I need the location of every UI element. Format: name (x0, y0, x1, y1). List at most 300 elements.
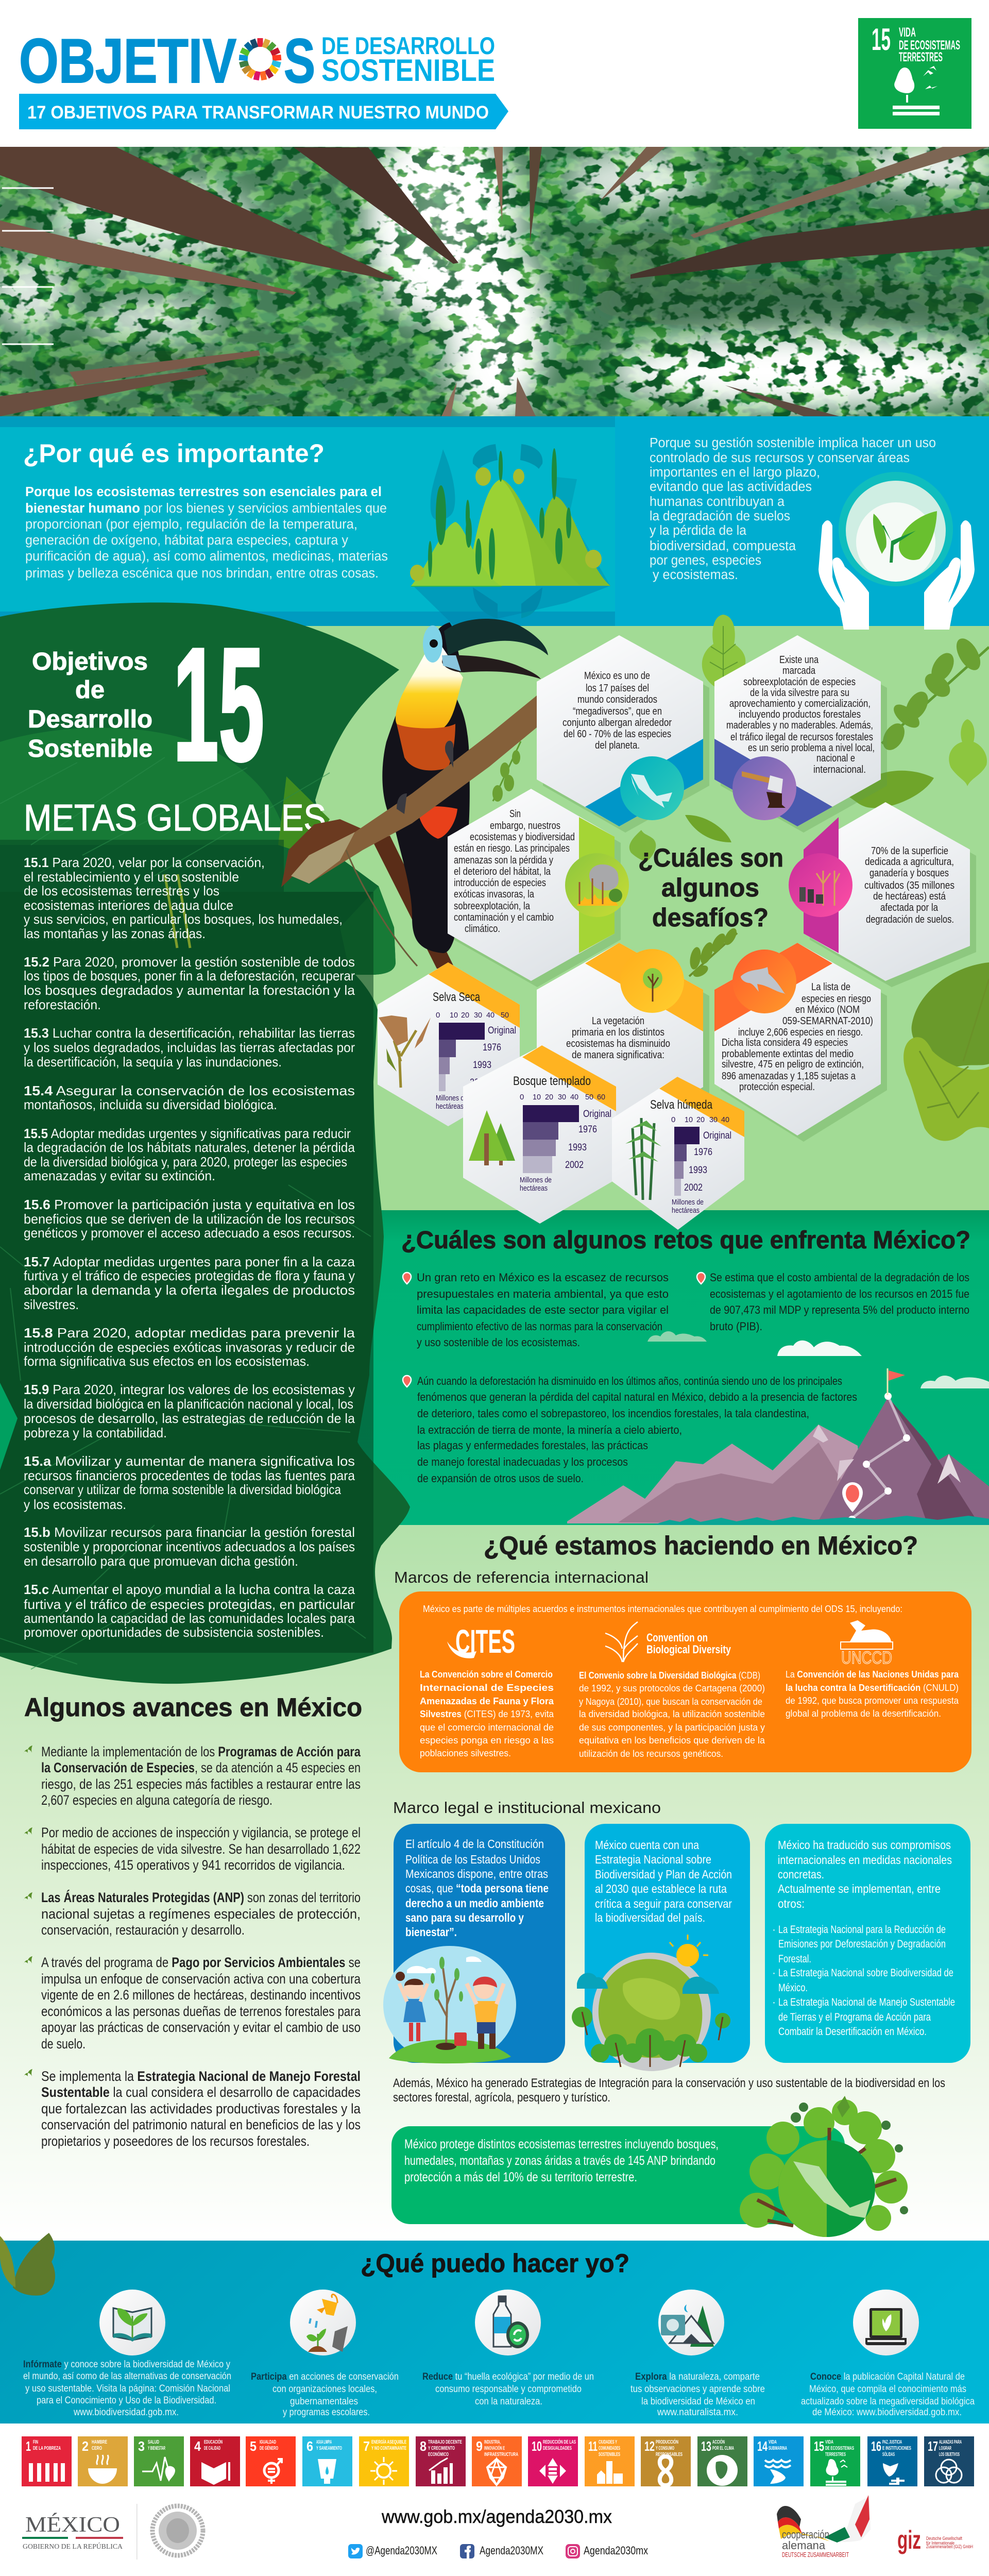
list: avances en México: conservación del patrimonio natural en beneficios de las y los (41, 2117, 361, 2132)
text: metas globales list: aumentando la capacidad de las comunidades locales para (24, 1611, 355, 1626)
action: reduce (422, 2290, 594, 2407)
hexagon: superficie degradada: ganadería y bosques (869, 868, 949, 879)
hexagon chart: selva húmeda: Selva húmeda (650, 1098, 713, 1112)
text: metas globales list: sostenible y proporcionar incentivos adecuados a los países (24, 1539, 355, 1554)
icon: twitter (348, 2544, 363, 2558)
hexagon: vegetación primaria: La vegetación (592, 1015, 644, 1027)
text: CNULD: La Convención de las Naciones Unidas para (786, 1669, 959, 1680)
hexagon chart: bosque templado: 0 (520, 1093, 524, 1101)
text: metas globales list: forma significativa sus efectos en los ecosistemas. (24, 1353, 310, 1369)
text: reto presupuestal: presupuestales en materia ambiental, ya que esto (417, 1287, 669, 1300)
hexagon: sobreexplotación: Existe una (779, 654, 819, 666)
section band: por qué es importante (0, 416, 989, 626)
hexagon chart: selva húmeda: 40 (721, 1115, 729, 1124)
icon: dry trees and barrels (789, 853, 852, 917)
banner: 17 objetivos: 17 OBJETIVOS PARA TRANSFORMAR NUESTRO MUNDO (27, 103, 489, 123)
panel: artículo 4: derecho a un medio ambiente (405, 1896, 544, 1910)
hexagon chart: selva seca (378, 962, 520, 1126)
icon: national seal (152, 2506, 203, 2555)
text: gestión sostenible: humanas contribuyan a (650, 495, 785, 509)
hexagon: especies en riesgo: Dicha lista considera 49 especies (722, 1037, 848, 1048)
hexagon: superficie degradada: dedicada a agricultura, (865, 856, 954, 868)
text: por qué es importante: primas y belleza escénica que nos brindan, entre otras cosas. (25, 566, 379, 581)
text: CITES: Silvestres (CITES) de 1973, evita (420, 1709, 554, 1719)
panel: compromisos internacionales: de Tierras y el Programa de Acción para (778, 2011, 931, 2023)
tile 9: INFRAESTRUCTURA (484, 2452, 518, 2458)
logo: cooperación alemana: DEUTSCHE ZUSAMMENARBEIT (782, 2551, 849, 2558)
text: metas globales list: 15.1 Para 2020, velar por la conservación, (24, 855, 265, 870)
action: explora: www.naturalista.mx. (657, 2407, 738, 2418)
hexagon chart: selva húmeda: 0 (671, 1115, 675, 1124)
icon: ODS 15 tile: VIDA (899, 25, 916, 40)
tile 4 (190, 2436, 240, 2486)
text: reto presupuestal: Un gran reto en México es la escasez de recursos (417, 1271, 669, 1284)
icon: facebook (460, 2544, 474, 2558)
panel: áreas protegidas: humedales, montañas y zonas áridas a través de 145 ANP brindando (404, 2154, 715, 2168)
hexagon: especies en riesgo: silvestre, 475 en peligro de extinción, (722, 1059, 864, 1070)
hexagon: México megadiverso (537, 635, 709, 833)
panel: estrategia nacional biodiversidad: crítica a seguir para conservar (595, 1897, 732, 1910)
icon: axe and stump (732, 756, 796, 820)
logo: giz: Zusammenarbeit (GIZ) GmbH (926, 2544, 973, 2549)
panel: artículo 4: El artículo 4 de la Constitución (405, 1837, 544, 1851)
heading: cuáles son algunos desafíos (638, 843, 783, 932)
hexagon: sobreexplotación: marcada (782, 665, 816, 676)
heading: metas globales: METAS GLOBALES (24, 798, 326, 839)
logo: giz: für Internationale (926, 2540, 954, 2546)
tile 10: DESIGUALDADES (543, 2446, 572, 2451)
action: participa: con organizaciones locales, (272, 2384, 377, 2395)
text: metas globales list: 15.6 Promover la participación justa y equitativa en los (24, 1197, 355, 1212)
heading: por qué es importante: ¿Por qué es importante? (23, 439, 325, 468)
hexagon: sobreexplotación: internacional. (813, 764, 866, 775)
text: metas globales list: beneficios que se deriven de la utilización de los recursos (24, 1211, 355, 1227)
heading: Objetivos de Desarrollo Sostenible (28, 648, 152, 762)
tile 13 (697, 2436, 747, 2486)
list: avances en México: riesgo, de las 251 especies más factibles a restaurar entre las (41, 1776, 361, 1792)
dark leaf background with targets (0, 602, 410, 1684)
hexagon chart: selva seca: 50 (501, 1011, 509, 1020)
list: avances en México: inspecciones, 415 operativos y 941 recorridos de vigilancia. (41, 1857, 345, 1873)
text: gestión sostenible: evitando que las actividades (650, 480, 812, 494)
hexagon: ecosistemas en riesgo: embargo, nuestros (490, 820, 560, 832)
action: participa: y programas escolares. (283, 2407, 370, 2418)
hexagon: ecosistemas en riesgo: Sin (509, 808, 521, 820)
icon: México map (620, 756, 684, 820)
illustration: green globe (572, 1935, 730, 2071)
tile 4: EDUCACIÓN (204, 2438, 223, 2445)
text: CNULD: de 1992, que busca promover una respuesta (786, 1696, 959, 1706)
tile 11: 11 (588, 2438, 598, 2454)
SDG tiles row (22, 2436, 974, 2486)
tile 14: 14 (757, 2438, 768, 2454)
panel: artículo 4: Política de los Estados Unidos (405, 1853, 540, 1866)
tile 14: VIDA (769, 2439, 777, 2445)
tile 17: 17 (928, 2438, 938, 2454)
text: CITES: La Convención sobre el Comercio (420, 1669, 553, 1680)
hexagon: especies en riesgo: en México (NOM (795, 1004, 860, 1015)
tile 15: VIDA (825, 2439, 833, 2445)
tile 11: SOSTENIBLES (599, 2452, 620, 2458)
text: reto presupuestal (403, 1271, 669, 1349)
text: gestión sostenible: biodiversidad, compuesta (650, 539, 796, 553)
tile 11: CIUDADES Y (599, 2439, 617, 2445)
text: por qué es importante: bienestar humano (25, 501, 140, 516)
hexagon: superficie degradada: de hectáreas) está (873, 891, 946, 902)
panel: artículo 4: bienestar”. (405, 1925, 457, 1939)
tile 10: 10 (532, 2438, 542, 2454)
heading: qué puedo hacer yo: ¿Qué puedo hacer yo? (361, 2249, 629, 2278)
logo: cooperación alemana (777, 2495, 871, 2558)
text: CITES (420, 1669, 554, 1758)
icon: ODS 15 tile: TERRESTRES (899, 50, 943, 64)
icon: SDG colour wheel (239, 38, 281, 80)
social media links (348, 2544, 648, 2558)
panel: artículo 4: cosas, que “toda persona tiene (405, 1882, 549, 1895)
hexagon: superficie degradada: cultivados (35 millones (864, 880, 954, 891)
hexagon: México megadiverso: conjunto albergan alrededor (562, 717, 672, 728)
tile 7: ENERGÍA ASEQUIBLE (371, 2438, 406, 2445)
panel: marcos internacionales (399, 1591, 971, 1772)
panel: compromisos internacionales: · (772, 1996, 776, 2008)
header logo: Objetivos de Desarrollo Sostenible: SOSTENIBLE (321, 53, 495, 88)
illustration: toucan on branch (281, 619, 548, 969)
hexagon: ecosistemas en riesgo: exóticas invasoras, la (454, 889, 535, 900)
list: avances en México: Sustentable la cual considera el desarrollo de capacidades (41, 2084, 361, 2100)
list: avances en México: propietarios y poseedores de los recursos forestales. (41, 2133, 310, 2149)
logo: UNCCD: UNCCD (841, 1648, 892, 1668)
tile 15 (810, 2436, 860, 2486)
text: CDB: utilización de los recursos genéticos. (579, 1749, 723, 1759)
logo: CITES (447, 1623, 515, 1660)
hexagon: vegetación primaria: de manera significativa: (572, 1049, 664, 1061)
tile 9: INDUSTRIA, (484, 2439, 501, 2445)
panel: compromisos internacionales: concretas. (778, 1868, 824, 1881)
icon: pine trees (469, 1110, 515, 1165)
tile 12: Y CONSUMO (656, 2446, 674, 2451)
text: reto presupuestal: y uso sostenible de los ecosistemas. (417, 1336, 580, 1349)
logo: giz: Deutsche Gesellschaft (926, 2536, 962, 2541)
hexagon chart: selva seca: 2002 (470, 1077, 488, 1088)
text: metas globales list: ecosistemas interiores de agua dulce (24, 897, 233, 913)
icon: location pin (697, 1273, 705, 1284)
tile 12: RESPONSABLES (656, 2452, 683, 2458)
text: reto presupuestal: limita las capacidades de este sector para vigilar el (417, 1303, 669, 1316)
hexagon: sobreexplotación: de la vida silvestre para su (750, 687, 849, 699)
text: por qué es importante (25, 485, 388, 581)
list: avances en México: A través del programa de Pago por Servicios Ambientales se (41, 1955, 361, 1970)
text: por qué es importante: purificación de agua), así como alimentos, medicinas, materias (25, 549, 388, 564)
list: avances en México: económicos a las personas dueñas de terrenos forestales para (41, 2004, 361, 2019)
hexagon chart: bosque templado: 20 (545, 1093, 553, 1101)
hexagon: especies en riesgo: 059-SEMARNAT-2010) (782, 1015, 873, 1027)
hexagon chart: bosque templado: 60 (597, 1093, 605, 1101)
panel: artículo 4: sano para su desarrollo y (405, 1911, 524, 1924)
tile 17 (924, 2436, 974, 2486)
tile 1 (22, 2436, 72, 2486)
hexagon: sobreexplotación: sobreexplotación de especies (743, 676, 856, 688)
panel: áreas protegidas (391, 2096, 908, 2237)
tile 2: HAMBRE (92, 2439, 107, 2445)
tile 15: 15 (814, 2438, 824, 2454)
action: infórmate: www.biodiversidad.gob.mx. (73, 2407, 179, 2418)
hexagon: especies en riesgo: especies en riesgo (802, 993, 871, 1005)
green background: desafíos (0, 626, 989, 1210)
photo: forest canopy seen from below (0, 144, 989, 416)
text: deforestación: Aún cuando la deforestación ha disminuido en los últimos años, continúa siendo uno de los principales (417, 1375, 842, 1387)
action: infórmate: Infórmate y conoce sobre la biodiversidad de México y (23, 2359, 230, 2370)
tile 17: ALIANZAS PARA (939, 2439, 962, 2445)
text: CDB (579, 1670, 765, 1759)
header logo: Objetivos de Desarrollo Sostenible: S (284, 26, 315, 96)
tile 12: PRODUCCIÓN (656, 2438, 678, 2445)
hexagon chart: bosque templado: Original (583, 1109, 611, 1120)
tile 2: 2 (82, 2438, 89, 2454)
hexagon chart: bosque templado: Millones de (520, 1176, 552, 1184)
hexagon chart: bosque templado: 1993 (568, 1142, 587, 1153)
tile 7: 7 (363, 2438, 370, 2454)
decorative leaves on band (0, 2233, 55, 2296)
website link: www.gob.mx/agenda2030.mx (381, 2506, 612, 2527)
panel: áreas protegidas: México protege distintos ecosistemas terrestres incluyendo bosques, (404, 2137, 719, 2151)
icon: vaquita porpoise (732, 950, 796, 1013)
tile 7: Y NO CONTAMINANTE (371, 2446, 406, 2451)
hexagon: vegetación primaria (537, 943, 709, 1140)
panel: estrategia nacional biodiversidad: Estrategia Nacional sobre (595, 1853, 711, 1866)
text: metas globales list: y sus servicios, en particular los bosques, los humedales, (24, 911, 343, 927)
tile 8: Y CRECIMIENTO (428, 2446, 455, 2451)
hexagon chart: selva húmeda: Original (703, 1130, 731, 1141)
text: CNULD (786, 1669, 959, 1719)
text: CDB: de 1992, y sus protocolos de Cartagena (2000) (579, 1683, 765, 1693)
panel: compromisos internacionales: · (772, 1924, 776, 1936)
text: gestión sostenible: y ecosistemas. (653, 568, 738, 582)
tile 6: AGUA LIMPIA (316, 2439, 332, 2445)
icon: leaf bullet (23, 1745, 32, 1754)
panel: compromisos internacionales: México. (778, 1982, 808, 1994)
tile 15: TERRESTRES (825, 2452, 846, 2458)
hexagon chart: bosque templado: 50 (585, 1093, 593, 1101)
text: metas globales list: procesos de desarrollo, las estrategias de reducción de la (24, 1411, 355, 1426)
hexagon: especies en riesgo: La lista de (811, 981, 850, 993)
panel: estrategia nacional biodiversidad: la biodiversidad del país. (595, 1911, 705, 1924)
hexagon: ecosistemas en riesgo: el deterioro del hábitat, la (454, 866, 551, 877)
tile 3: 3 (138, 2438, 145, 2454)
text: gestión sostenible: la degradación de suelos (650, 509, 790, 523)
action: explora: la biodiversidad de México en (641, 2396, 755, 2407)
heading: Objetivos de Desarrollo Sostenible: de (75, 676, 105, 704)
panel: estrategia nacional biodiversidad (572, 1824, 750, 2071)
hexagon: ecosistemas en riesgo: sobreexplotación, la (454, 901, 531, 912)
tile 10 (528, 2436, 578, 2486)
hexagon: ecosistemas en riesgo: amenazas son la pérdida y (454, 855, 553, 866)
list: avances en México: nacional sujetas a regímenes especiales de protección, (41, 1906, 361, 1922)
text: gestión sostenible: por genes, especies (650, 553, 761, 568)
header logo: Objetivos de Desarrollo Sostenible (19, 26, 495, 96)
action: reduce: consumo responsable y comprometido (435, 2384, 582, 2395)
text: gestión sostenible: controlado de sus recursos y conservar áreas (650, 451, 910, 465)
list: avances en México: Por medio de acciones de inspección y vigilancia, se protege el (41, 1825, 361, 1840)
hexagon chart: bosque templado: 30 (558, 1093, 566, 1101)
hexagon: especies en riesgo (714, 943, 887, 1142)
action: reduce: Reduce tu “huella ecológica” por medio de un (422, 2371, 594, 2382)
icon: bamboo (625, 1118, 661, 1200)
logo: cooperación alemana: cooperación (782, 2528, 829, 2541)
logo: Convention on Biological Diversity (605, 1622, 731, 1662)
tile 16: PAZ, JUSTICIA (882, 2439, 902, 2445)
hexagon: superficie degradada: afectada por la (880, 902, 939, 913)
logo: Convention on Biological Diversity: Convention on (646, 1631, 708, 1644)
panel: marcos internacionales: México es parte de múltiples acuerdos e instrumentos internacionales que contribuyen al cumplimiento del ODS 15, incluyendo: (423, 1604, 902, 1614)
hexagon chart: selva húmeda: 30 (709, 1115, 718, 1124)
text: gestión sostenible: Porque su gestión sostenible implica hacer un uso (650, 436, 936, 450)
logo: Convention on Biological Diversity: Biological Diversity (646, 1643, 731, 1656)
heading: marco legal: Marco legal e institucional mexicano (393, 1799, 661, 1817)
text: deforestación (403, 1375, 857, 1485)
panel: compromisos internacionales: Actualmente se implementan, entre (778, 1882, 941, 1895)
text: CDB: la diversidad biológica, la utilización sostenible (579, 1709, 765, 1719)
tile 12 (641, 2436, 691, 2486)
tile 3: SALUD (148, 2439, 159, 2445)
text: metas globales list: reforestación. (24, 997, 101, 1012)
tile 13: POR EL CLIMA (712, 2446, 734, 2451)
icon: location pin (403, 1273, 411, 1284)
heading: Objetivos de Desarrollo Sostenible: Sostenible (28, 735, 152, 762)
list: avances en México: vigente de en 2.6 millones de hectáreas, destinando incentivos (41, 1987, 361, 2003)
action: reduce: con la naturaleza. (475, 2396, 542, 2407)
tile 14 (754, 2436, 804, 2486)
logo: cooperación alemana: alemana (782, 2539, 826, 2552)
hexagon chart: selva seca: 1993 (473, 1060, 491, 1071)
light background: acciones en México (0, 1525, 989, 2241)
text: metas globales list: los tipos de bosques, poner fin a la deforestación, recuperar (24, 968, 355, 984)
action: participa: gubernamentales (290, 2396, 358, 2407)
hexagon: especies en riesgo: 896 amenazadas y 1,185 sujetas a (722, 1071, 856, 1082)
illustration: globe with trees and México map (740, 2096, 908, 2237)
tile 12: 12 (644, 2438, 655, 2454)
text: metas globales list: 15.5 Adoptar medidas urgentes y significativas para reducir (24, 1126, 351, 1141)
tile 16: SÓLIDAS (882, 2451, 895, 2458)
tile 6: Y SANEAMIENTO (316, 2446, 342, 2451)
action: infórmate: el mundo, así como de las alternativas de conservación (23, 2371, 231, 2382)
icon: laptop with leaf (865, 2308, 907, 2345)
logo: Gobierno de la República (22, 2504, 203, 2560)
text: metas globales list: introducción de especies exóticas invasoras y reducir de (24, 1340, 355, 1355)
tile 9: 9 (476, 2438, 483, 2454)
tile 5: 5 (250, 2438, 257, 2454)
hexagon chart: selva húmeda: hectáreas (672, 1206, 700, 1215)
tile 8: ECONÓMICO (428, 2451, 449, 2458)
hexagon: ecosistemas en riesgo: están en riesgo. Las principales (454, 843, 570, 854)
tile 3: Y BIENESTAR (148, 2446, 165, 2451)
list: avances en México: apoyar las prácticas de conservación y evitar el cambio de uso (41, 2020, 361, 2035)
action: explora (630, 2290, 765, 2418)
action: infórmate: para el Conocimiento y Uso de la Biodiversidad. (37, 2395, 216, 2406)
hexagon: ecosistemas en riesgo: introducción de especies (454, 877, 546, 889)
list: avances en México: hábitat de especies de vida silvestre. Se han desarrollado 1,622 (41, 1841, 361, 1857)
illustration: hands holding plant (819, 472, 975, 630)
tile 14: SUBMARINA (769, 2446, 787, 2451)
text: reto presupuestal: cumplimiento efectivo de las normas para la conservación (417, 1320, 662, 1333)
text: CITES: que el comercio internacional de (420, 1722, 554, 1733)
text: metas globales list: la desertificación, la sequía y las inundaciones. (24, 1054, 282, 1070)
icon: dry plant (379, 1015, 431, 1088)
action: explora: Explora la naturaleza, comparte (635, 2371, 760, 2382)
tile 6: 6 (306, 2438, 313, 2454)
text: costo ambiental (697, 1271, 969, 1333)
action: conoce: de México: www.biodiversidad.gob.mx. (812, 2407, 962, 2418)
action: infórmate (23, 2290, 231, 2418)
text: deforestación: de manejo forestal inadecuadas y los procesos (417, 1455, 628, 1468)
text: metas globales list: el restablecimiento y el uso sostenible (24, 869, 239, 885)
heading: algunos avances en México: Algunos avances en México (24, 1693, 362, 1722)
text: metas globales list: de la diversidad biológica y, para 2020, proteger las especies (24, 1154, 347, 1170)
tile 13: 13 (701, 2438, 711, 2454)
tile 8 (416, 2436, 466, 2486)
panel: compromisos internacionales (765, 1824, 970, 2063)
text: deforestación: de deterioro, tales como el sobrepastoreo, los incendios forestales, la tala clandestina, (417, 1407, 809, 1420)
action: conoce: Conoce la publicación Capital Natural de (810, 2371, 965, 2382)
tile 1: FIN (33, 2439, 38, 2445)
banner: 17 objetivos (19, 94, 508, 129)
text: estrategias de integración (393, 2076, 945, 2105)
hexagon: sobreexplotación (714, 635, 887, 833)
text: CITES: especies ponga en riesgo a las (420, 1735, 554, 1745)
text: metas globales list: y los suelos degradados, incluidas las tierras afectadas por (24, 1040, 355, 1055)
heading: marcos de referencia internacional: Marcos de referencia internacional (394, 1568, 649, 1586)
panel: compromisos internacionales: México ha traducido sus compromisos (778, 1838, 951, 1852)
hexagon: vegetación primaria: primaria en los distintos (572, 1027, 664, 1038)
hexagon: sobreexplotación: es un serio problema a nivel local, (748, 742, 875, 754)
tile 3 (134, 2436, 184, 2486)
tile 17: LOS OBJETIVOS (939, 2452, 960, 2458)
section band: qué puedo hacer yo (0, 2241, 989, 2424)
heading: retos que enfrenta México: ¿Cuáles son algunos retos que enfrenta México? (401, 1227, 970, 1254)
text: metas globales list: conservar y utilizar de forma sostenible la diversidad biológica (24, 1482, 341, 1497)
text: deforestación: fenómenos que generan la pérdida del capital natural en México, debido a la presencia de factores (417, 1391, 857, 1403)
text: CDB: de sus componentes, y la participación justa y (579, 1722, 765, 1733)
logo: giz: giz (897, 2526, 921, 2554)
big number 15: 15 (173, 615, 264, 794)
list: avances en México: impulsa un enfoque de conservación activa con una cobertura (41, 1971, 361, 1987)
text: metas globales list: la degradación de los hábitats naturales, detener la pérdida (24, 1140, 355, 1155)
green background: retos (0, 1210, 989, 1525)
text: metas globales list: y los ecosistemas. (24, 1497, 126, 1512)
tile 17: LOGRAR (939, 2446, 951, 2451)
text: metas globales list: genéticos y promover el acceso adecuado a esos recursos. (24, 1225, 355, 1241)
panel: compromisos internacionales: Forestal. (778, 1953, 811, 1965)
text: metas globales list: furtiva y el tráfico de especies protegidas, en particular (24, 1597, 355, 1612)
social media links: Agenda2030MX (480, 2544, 543, 2557)
header logo: Objetivos de Desarrollo Sostenible: OBJETIV (19, 26, 236, 96)
heading: Objetivos de Desarrollo Sostenible: Objetivos (32, 648, 148, 675)
hexagon chart: bosque templado: hectáreas (520, 1184, 548, 1193)
decorative leaves around the hexagons (492, 615, 989, 1141)
hexagon: sobreexplotación: nacional e (816, 753, 855, 764)
tile 1: DE LA POBREZA (33, 2446, 61, 2451)
illustration: children planting a tree (383, 1946, 516, 2063)
hexagon: México megadiverso: mundo considerados (577, 694, 657, 705)
panel: compromisos internacionales: · (772, 1967, 776, 1979)
text: deforestación: las plagas y enfermedades forestales, las prácticas (417, 1439, 648, 1452)
tile 5: DE GÉNERO (260, 2445, 278, 2451)
illustration: mountains with trees (410, 444, 610, 626)
heading: qué estamos haciendo: ¿Qué estamos haciendo en México? (484, 1531, 918, 1560)
text: metas globales list: silvestres. (24, 1297, 79, 1312)
icon: instagram (566, 2544, 580, 2558)
hexagon chart: bosque templado: 2002 (565, 1160, 584, 1171)
text: metas globales list: 15.8 Para 2020, adoptar medidas para prevenir la (24, 1325, 355, 1341)
